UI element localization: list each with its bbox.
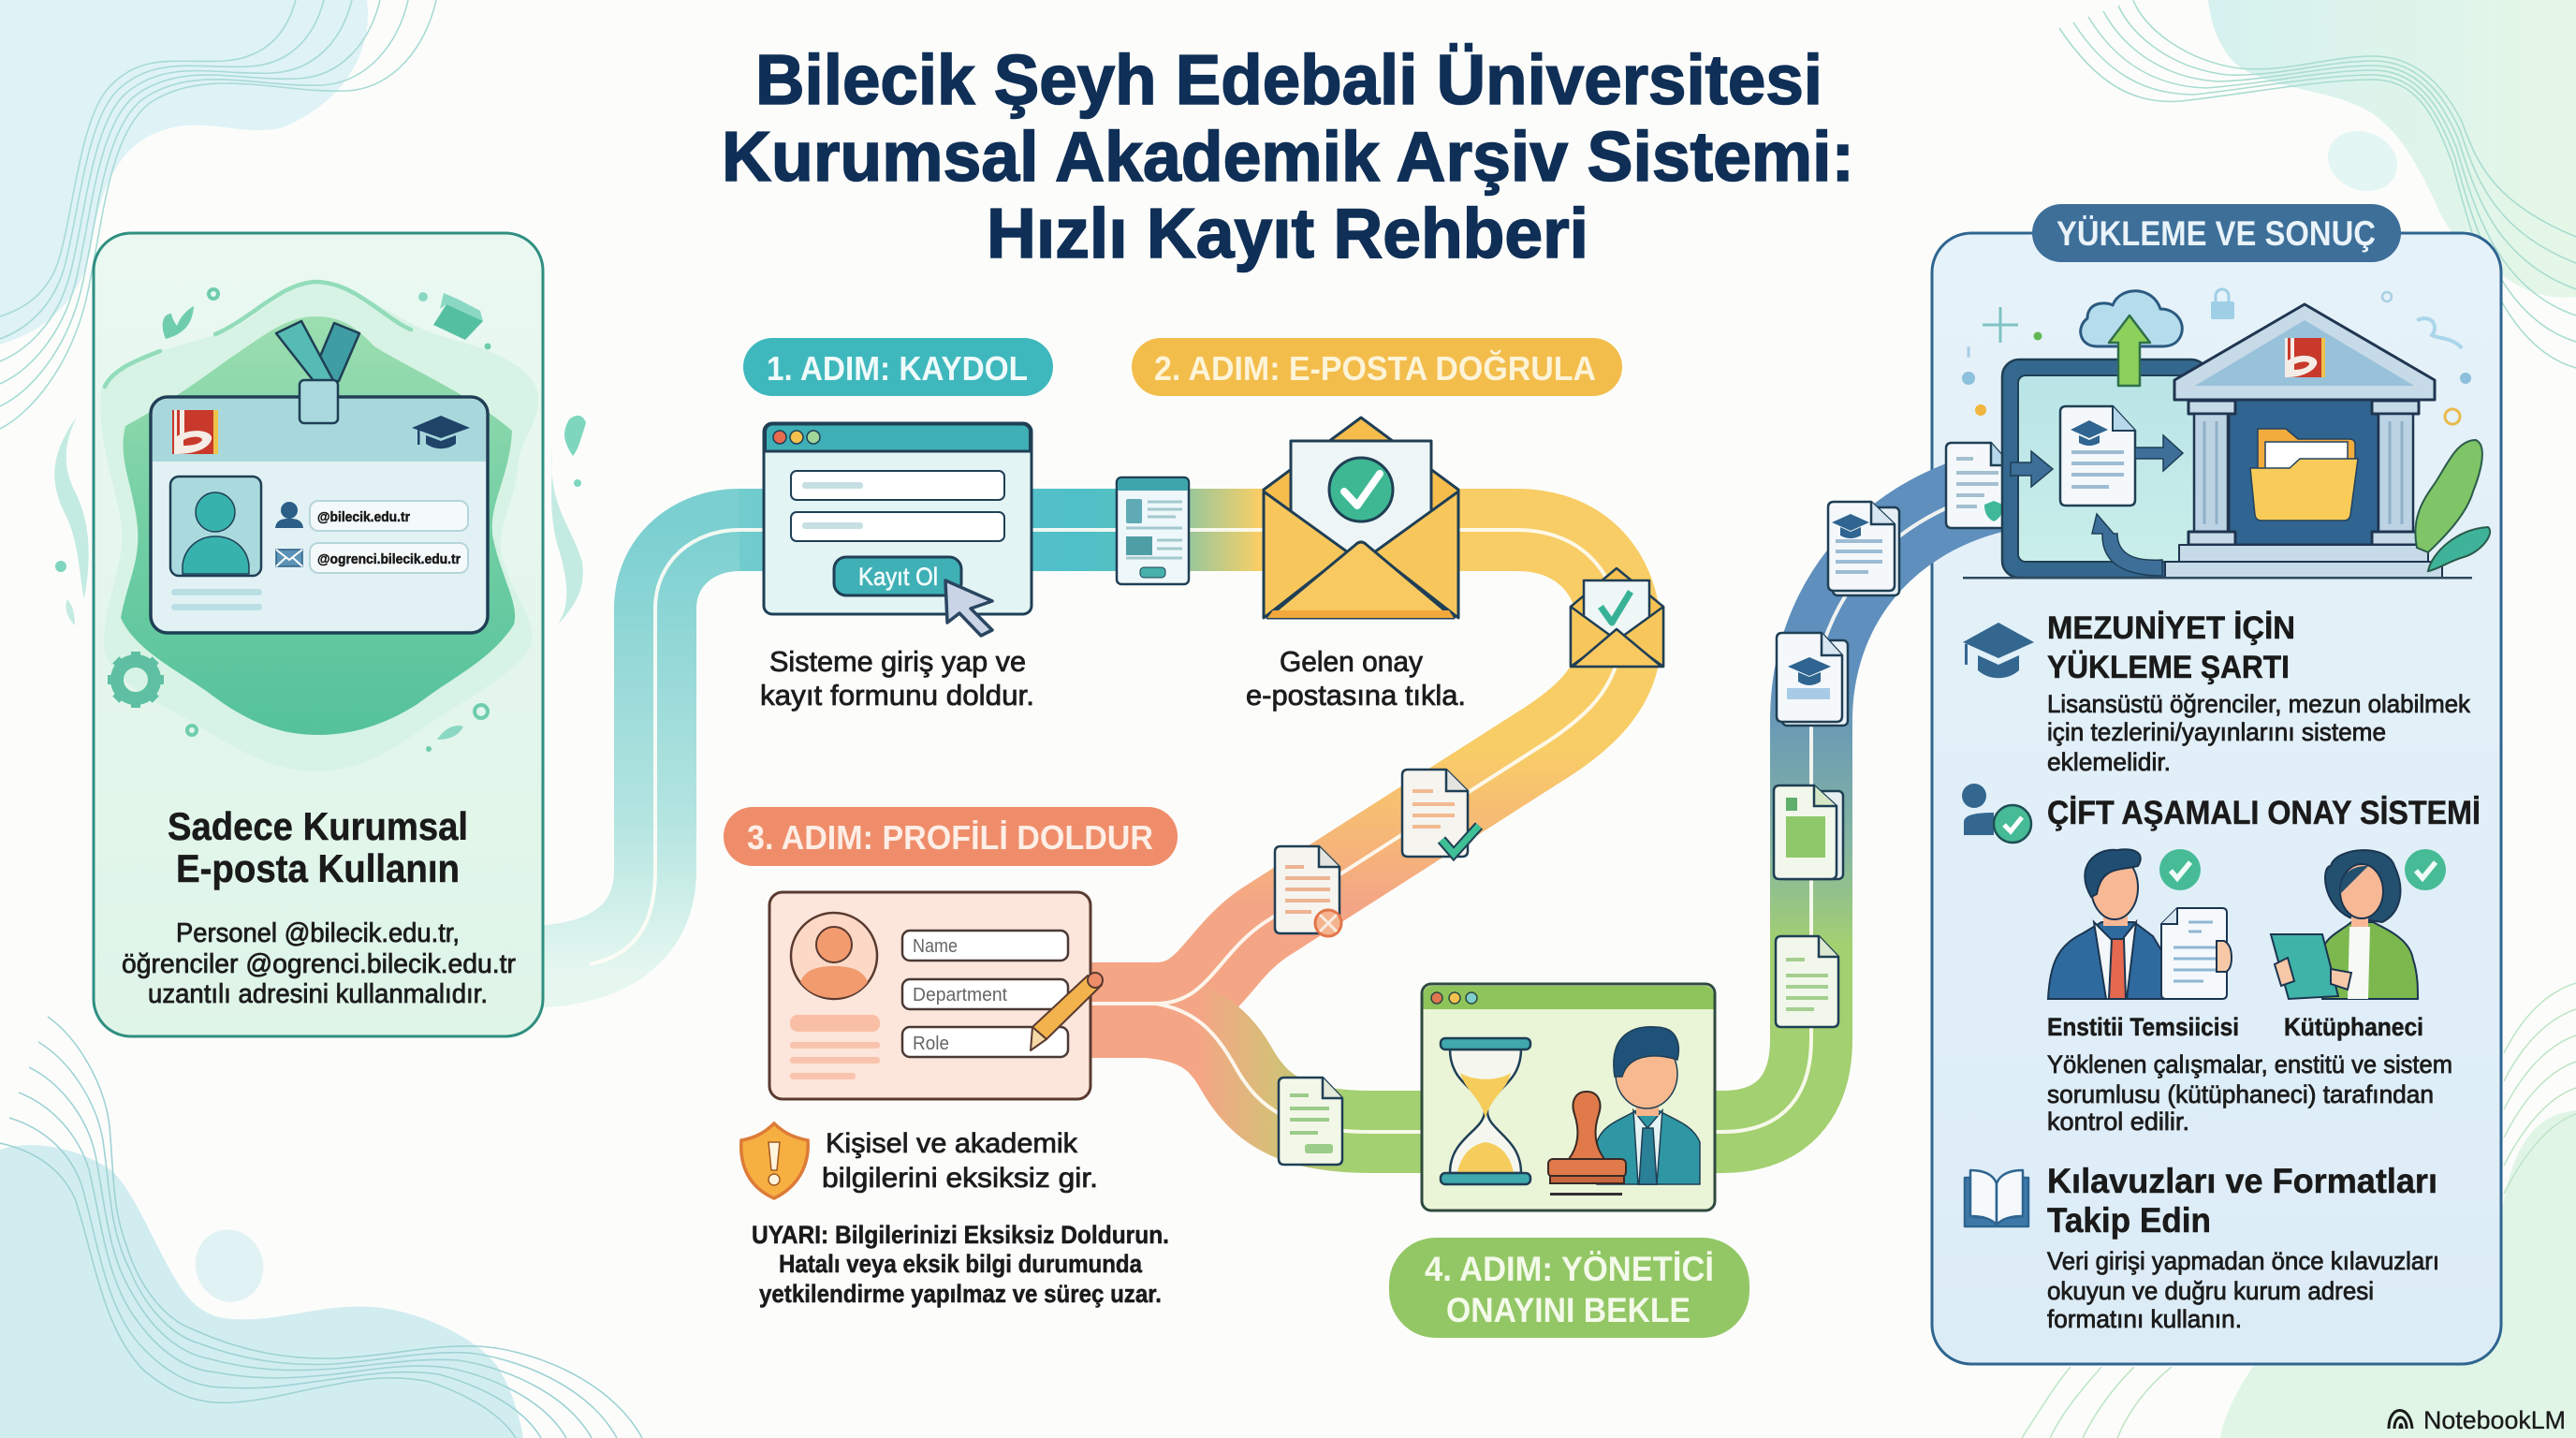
field: role	[902, 1027, 1068, 1057]
warning text: yetkilendirme yapılmaz ve süreç uzar.	[759, 1280, 1162, 1308]
panel: institutional email	[54, 233, 586, 1036]
role labels: Enstitii Temsiicisi	[2047, 1013, 2239, 1041]
panel: upload and result background	[1932, 233, 2501, 1364]
icon: graduation cap	[1963, 623, 2034, 678]
signup button: Kayıt Ol	[858, 563, 938, 591]
field: student email: @ogrenci.bilecik.edu.tr	[317, 551, 461, 567]
heading: institutional email: Sadece Kurumsal	[168, 804, 468, 848]
icon: big envelope	[1264, 418, 1458, 618]
body text	[2047, 1247, 2439, 1333]
approval window	[1422, 984, 1715, 1211]
profile form card	[769, 892, 1103, 1099]
body text	[2047, 1050, 2452, 1136]
text: step 1: kayıt formunu doldur.	[760, 679, 1034, 712]
body text: Veri girişi yapmadan önce kılavuzları	[2047, 1247, 2439, 1275]
body text: eklemelidir.	[2047, 748, 2171, 776]
text: complete the profile: bilgilerini eksiksiz gir.	[822, 1163, 1098, 1194]
field: staff email: @bilecik.edu.tr	[317, 509, 410, 525]
step 2 pill	[1132, 338, 1622, 396]
heading: institutional email	[168, 804, 468, 890]
text: email rule: uzantılı adresini kullanmalıdır.	[148, 979, 488, 1009]
decorative icons	[54, 289, 586, 752]
graduation cap	[412, 416, 470, 448]
field: department	[902, 979, 1068, 1009]
body text: sorumlusu (kütüphaneci) tarafından	[2047, 1080, 2434, 1108]
icon: stamp	[1548, 1092, 1626, 1183]
id card	[151, 380, 488, 633]
step 3 pill: 3. ADIM: PROFİLİ DOLDUR	[747, 818, 1153, 857]
icon: hourglass	[1441, 1038, 1530, 1184]
text: step 1: Sisteme giriş yap ve	[769, 645, 1026, 678]
body text: Lisansüstü öğrenciler, mezun olabilmek	[2047, 690, 2470, 718]
text: step 1	[760, 645, 1034, 712]
role labels: Kütüphaneci	[2284, 1013, 2423, 1041]
document 2	[1828, 502, 1899, 595]
icon: document with check	[1402, 770, 1479, 857]
documents on blue path	[1774, 443, 2011, 1027]
approved check	[2405, 849, 2446, 890]
icon: plant	[2415, 440, 2490, 571]
mail icon	[276, 550, 302, 566]
university logo	[172, 410, 218, 454]
title: Hızlı Kayıt Rehberi	[987, 194, 1588, 272]
heading: Kılavuzları ve Formatları	[2047, 1162, 2437, 1200]
body text: Yöklenen çalışmalar, enstitü ve sistem	[2047, 1050, 2452, 1078]
icon: document with badge	[1275, 846, 1341, 936]
body text: kontrol edilir.	[2047, 1108, 2189, 1136]
step 4 pill	[1389, 1238, 1749, 1338]
icon: open book	[1965, 1170, 2028, 1226]
icon: pencil	[1031, 973, 1103, 1050]
body text	[2047, 690, 2470, 776]
university archive illustration	[1962, 289, 2490, 579]
text: step 2: Gelen onay	[1280, 645, 1423, 678]
heading	[2047, 610, 2295, 685]
icon: small envelope on path	[1571, 568, 1663, 667]
section: graduation requirement	[1963, 610, 2470, 776]
icon: cloud	[2081, 291, 2182, 346]
text: email rule: Personel @bilecik.edu.tr,	[176, 918, 460, 948]
title: Kurumsal Akademik Arşiv Sistemi:	[722, 117, 1854, 196]
results pill	[2032, 204, 2401, 262]
figure: institute representative	[2048, 849, 2232, 999]
figure: librarian	[2271, 849, 2446, 999]
field: staff email	[310, 501, 468, 531]
warning text	[752, 1221, 1169, 1308]
id card illustration	[100, 282, 538, 771]
icon: small form document	[1117, 477, 1189, 584]
field: role: Role	[913, 1034, 949, 1054]
flow path ribbon	[524, 492, 1994, 1132]
notebooklm watermark: NotebookLM	[2423, 1406, 2566, 1434]
avatar	[791, 913, 877, 999]
document in hand	[2161, 908, 2232, 999]
heading: MEZUNİYET İÇİN	[2047, 610, 2295, 646]
person reviewer	[1597, 1027, 1700, 1184]
role labels	[2047, 1013, 2423, 1041]
body text: formatını kullanın.	[2047, 1305, 2242, 1333]
body text: için tezlerini/yayınlarını sisteme	[2047, 718, 2386, 746]
gear	[108, 652, 164, 708]
icon: cursor	[945, 580, 992, 636]
text: complete the profile	[822, 1128, 1098, 1194]
step 1 pill	[743, 338, 1053, 396]
section: guides and formats	[1965, 1162, 2439, 1333]
document 3	[1777, 633, 1848, 726]
icon: approved user	[1962, 784, 2031, 843]
text: step 2: e-postasına tıkla.	[1246, 679, 1466, 712]
text: email rule	[122, 918, 516, 1009]
text: complete the profile: Kişisel ve akademik	[826, 1128, 1078, 1159]
icon: tablet	[2002, 360, 2208, 578]
heading: Takip Edin	[2047, 1201, 2211, 1240]
icon: warning shield	[741, 1123, 808, 1198]
step 1 pill: 1. ADIM: KAYDOL	[767, 349, 1028, 388]
building	[2165, 304, 2442, 578]
icon: archive document	[2060, 406, 2135, 506]
step 2 pill: 2. ADIM: E-POSTA DOĞRULA	[1154, 349, 1596, 388]
text: email rule: öğrenciler @ogrenci.bilecik.edu.tr	[122, 949, 516, 979]
title: Bilecik Şeyh Edebali Üniversitesi	[755, 40, 1822, 119]
document 5	[1776, 936, 1838, 1027]
person icon	[275, 502, 303, 528]
photo frame	[170, 477, 261, 576]
icon: green document	[1279, 1078, 1342, 1165]
heading	[2047, 1162, 2437, 1240]
warning text: UYARI: Bilgilerinizi Eksiksiz Doldurun.	[752, 1221, 1169, 1249]
field: student email	[310, 543, 468, 573]
body text: okuyun ve duğru kurum adresi	[2047, 1277, 2374, 1305]
heading: YÜKLEME ŞARTI	[2047, 650, 2290, 685]
icon: folder	[2250, 429, 2358, 521]
heading: institutional email: E-posta Kullanın	[176, 846, 460, 890]
step 4 pill: ONAYINI BEKLE	[1446, 1291, 1690, 1329]
section: two stage approval	[1962, 784, 2481, 1136]
icon: upload arrow	[2109, 315, 2150, 386]
document 1	[1946, 443, 2011, 528]
signup button	[834, 557, 961, 595]
results pill: YÜKLEME VE SONUÇ	[2056, 214, 2376, 253]
step 3 pill	[724, 807, 1178, 866]
lanyard	[276, 321, 359, 433]
field: name	[902, 931, 1068, 961]
approved check	[2159, 849, 2201, 890]
field: department: Department	[913, 985, 1007, 1005]
decorative icons	[1962, 289, 2471, 424]
title	[722, 40, 1854, 272]
document 4	[1774, 785, 1843, 879]
signup window	[764, 423, 1032, 636]
field: name: Name	[913, 936, 958, 957]
warning text: Hatalı veya eksik bilgi durumunda	[779, 1250, 1143, 1278]
heading: ÇİFT AŞAMALI ONAY SİSTEMİ	[2047, 795, 2481, 831]
university logo	[2285, 338, 2325, 377]
step 4 pill: 4. ADIM: YÖNETİCİ	[1425, 1250, 1714, 1288]
icon: arrows	[2011, 435, 2183, 576]
text: step 2	[1246, 645, 1466, 712]
